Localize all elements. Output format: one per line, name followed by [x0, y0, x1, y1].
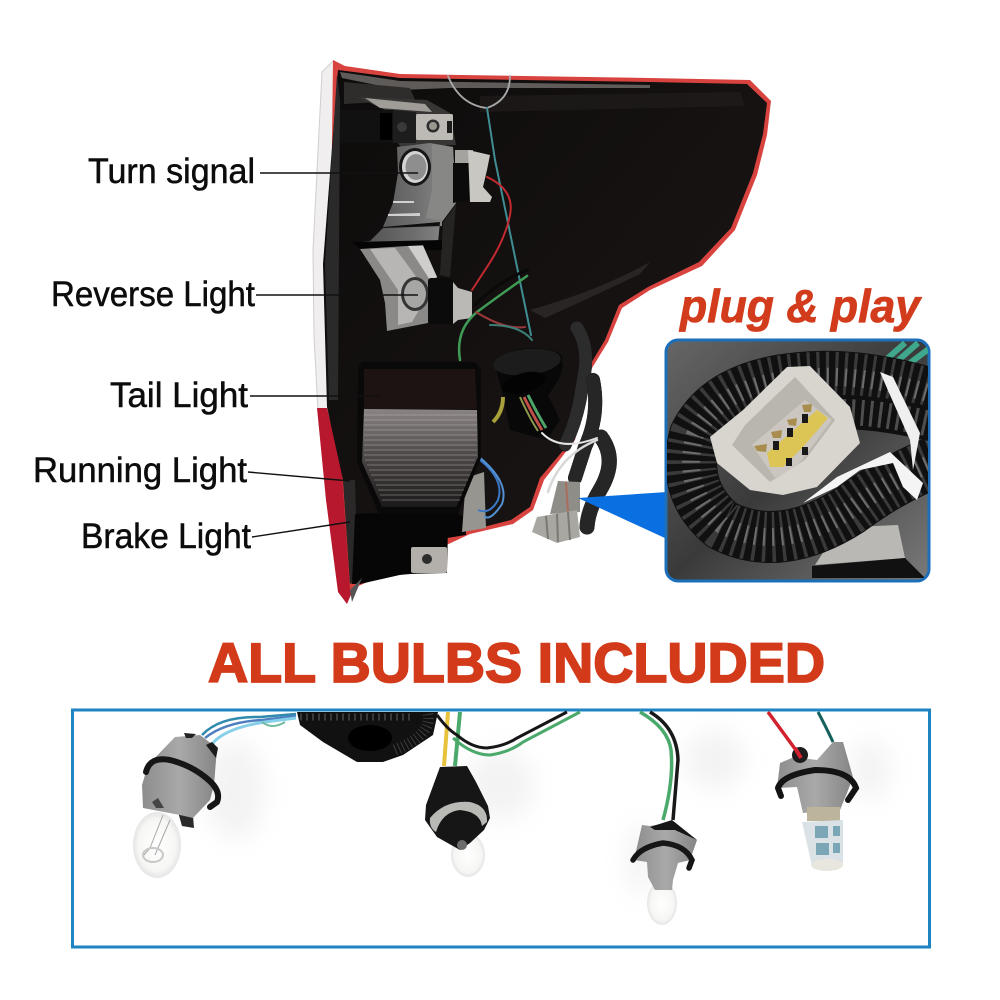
- housing black back: [323, 70, 767, 584]
- gray connector: [532, 481, 580, 543]
- bulb 4: [768, 712, 856, 871]
- wires in housing: [448, 76, 532, 360]
- red lens edge: [317, 408, 353, 604]
- label: Turn signal: Turn signal: [88, 152, 255, 191]
- label: Running Light: Running Light: [33, 451, 247, 490]
- reverse light housing: [352, 240, 472, 331]
- harness and grommet: [297, 712, 438, 762]
- top mount and screw plate: [340, 110, 453, 143]
- white cable ties: [803, 452, 923, 503]
- white connector: [710, 366, 860, 495]
- bulb 3: [633, 712, 697, 925]
- bulb 2: [425, 712, 580, 877]
- gold contacts: [767, 410, 828, 467]
- label: Tail Light: Tail Light: [110, 376, 248, 415]
- leader lines: [248, 173, 418, 537]
- tail light assembly: [313, 60, 771, 604]
- corrugated wire harness: [542, 328, 609, 527]
- panel: connector close-up: [666, 340, 935, 581]
- label: Brake Light: Brake Light: [81, 517, 251, 556]
- heading: ALL BULBS INCLUDED: ALL BULBS INCLUDED: [208, 631, 825, 694]
- turn signal socket: [453, 163, 470, 203]
- tail and brake lens block: [357, 362, 481, 514]
- panel: bulbs included: [72, 710, 930, 947]
- white clear lens edge: [313, 61, 345, 412]
- lower mount bracket: [350, 456, 504, 602]
- label: Reverse Light: Reverse Light: [51, 275, 255, 314]
- housing red outline: [330, 60, 771, 590]
- left inner frame: [325, 74, 340, 400]
- housing top silver rim: [340, 72, 650, 90]
- corrugated tube: [691, 377, 935, 537]
- heading: plug & play: plug & play: [678, 280, 922, 332]
- arrow: blue callout pointer: [578, 492, 667, 539]
- housing highlight: [530, 262, 650, 318]
- bulb 1: [133, 714, 296, 878]
- lower socket: [812, 525, 924, 578]
- turn signal bulb housing: [353, 97, 492, 277]
- turn signal lens ring: [399, 148, 431, 186]
- soft shadows: [205, 730, 890, 895]
- rubber grommet: [492, 346, 562, 440]
- green and blue wires: [885, 341, 928, 362]
